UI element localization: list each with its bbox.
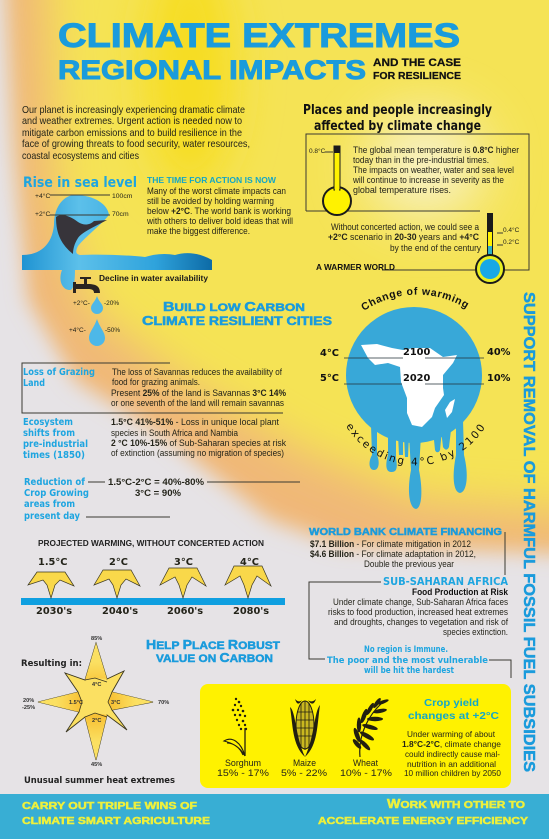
callout: no region is immune xyxy=(327,645,511,678)
panel: ecosystem shifts: times (1850) xyxy=(23,450,85,461)
vertical banner text: SUPPORT REMOVAL OF HARMFUL FOSSIL FUEL SUBSIDIES xyxy=(520,292,537,772)
heading: places and people xyxy=(303,103,492,134)
panel: crop yield xyxy=(200,684,511,788)
labels: crop names and values: 15% - 17% xyxy=(217,768,270,779)
label: unusual summer heat extremes: Unusual summer heat extremes xyxy=(24,776,175,786)
text: energy efficiency: WORK WITH OTHER TO xyxy=(387,797,525,811)
panel: sub-saharan africa xyxy=(309,575,509,659)
heading: crop yield changes: changes at +2°C xyxy=(408,710,499,722)
panel: ecosystem shifts: species in South Africa and Nambia xyxy=(111,428,238,438)
panel: ecosystem shifts: of extinction (assuming no migration of species) xyxy=(111,448,284,458)
chart: water drops: +2°C- xyxy=(73,299,90,307)
text: global mean temperature: will continue to increase in severity as the xyxy=(352,175,504,185)
label: sea level markers: +4°C xyxy=(35,192,50,200)
panel: reduction of crop growing areas xyxy=(24,477,300,522)
heading: places and people: Places and people increasingly xyxy=(303,103,492,118)
labels: crop names and values: Wheat xyxy=(353,758,378,769)
chart: heat extremes star: 1.5°C xyxy=(69,700,83,706)
panel: world bank climate financing xyxy=(309,526,505,575)
intro text: coastal ecosystems and cities xyxy=(22,151,139,162)
callout: no region is immune: No region is Immune. xyxy=(364,645,448,655)
icon: thermometer 2 xyxy=(476,213,520,283)
panel: reduction of crop growing areas: present day xyxy=(24,511,81,522)
intro text: Our planet is increasingly experiencing dramatic climate xyxy=(22,105,245,116)
text: global mean temperature: The global mean temperature is 0.8°C higher xyxy=(353,145,519,155)
panel: loss of grazing land: Loss of Grazing xyxy=(23,367,95,378)
label: sea level markers: 100cm xyxy=(112,193,133,200)
icon: thermometer 0.8 xyxy=(309,146,351,215)
heading: build low carbon: CLIMATE RESILIENT CITIES xyxy=(142,313,332,328)
curved label: exceeding 4C: exceeding 4°C by 2100 xyxy=(347,424,484,466)
callout: no region is immune: will be hit the hardest xyxy=(364,666,454,676)
panel: ecosystem shifts: pre-industrial xyxy=(23,439,88,450)
text: malnutrition note xyxy=(402,729,501,778)
panel: ecosystem shifts: 2 °C 10%-15% of Sub-Saharan species at risk xyxy=(111,438,286,448)
label: sea level markers: 70cm xyxy=(112,211,129,218)
icon: sorghum xyxy=(224,698,247,756)
chart: projected warming timeline: 4°C xyxy=(240,557,259,568)
panel: reduction of crop growing areas: areas from xyxy=(24,499,75,510)
panel: sub-saharan africa: SUB-SAHARAN AFRICA xyxy=(383,575,508,588)
text: time for action: below +2°C. The world bank is working xyxy=(147,206,291,217)
labels: crop names and values xyxy=(217,758,393,779)
panel: reduction of crop growing areas: Crop Growing xyxy=(24,488,89,499)
panel: a warmer world xyxy=(306,134,529,283)
chart: heat extremes star: -25% xyxy=(22,705,35,711)
labels: crop names and values: Sorghum xyxy=(225,758,261,769)
subtitle xyxy=(373,57,461,82)
chart: projected warming timeline: 2030's xyxy=(36,606,72,617)
text: time for action xyxy=(146,175,293,237)
text: malnutrition note: Under warming of about xyxy=(407,729,496,739)
curved label: change of warming: Change of warming xyxy=(362,287,468,310)
intro text: mitigate carbon emissions and to build resilience in the xyxy=(22,128,242,139)
text: without concerted action xyxy=(328,222,481,253)
panel: world bank climate financing: $7.1 Billion - For climate mitigation in 2012 xyxy=(310,539,471,549)
panel: ecosystem shifts xyxy=(23,417,286,461)
chart: heat extremes star: 3°C xyxy=(111,700,120,706)
chart: projected warming timeline: 2060's xyxy=(167,606,203,617)
panel: sub-saharan africa: risks to food production, increased heat extremes xyxy=(328,607,508,617)
text: time for action: with others to deliver bold ideas that will xyxy=(146,216,293,227)
label: warming rows xyxy=(320,347,511,384)
chart: water drops: -50% xyxy=(105,327,120,334)
icon: thermometer 2: 0.2°C xyxy=(503,238,520,246)
icon: wheat xyxy=(351,697,389,757)
label: sea level markers xyxy=(35,192,133,218)
chart: water drops xyxy=(69,296,120,346)
text: time for action: still be avoided by holding warming xyxy=(147,196,274,207)
chart: projected warming timeline xyxy=(21,539,285,617)
intro text: and weather extremes. Urgent action is needed now to xyxy=(22,116,242,127)
heading: crop yield changes xyxy=(408,697,499,722)
text: triple wins: CLIMATE SMART AGRICULTURE xyxy=(22,815,210,827)
labels: crop names and values: 10% - 17% xyxy=(340,768,393,779)
text: malnutrition note: 1.8°C-2°C, climate change xyxy=(402,739,501,749)
chart: projected warming timeline: 3°C xyxy=(174,557,193,568)
panel: loss of grazing land: Present 25% of the land is Savannas 3°C 14% xyxy=(111,388,286,398)
panel: world bank climate financing: WORLD BANK CLIMATE FINANCING xyxy=(309,526,502,538)
heading: rise in sea level: Rise in sea level xyxy=(23,175,137,191)
intro text xyxy=(22,105,250,162)
text: malnutrition note: could indirectly cause mal- xyxy=(405,749,500,759)
footer band xyxy=(0,794,549,839)
chart: heat extremes star: 20% xyxy=(23,698,34,704)
title xyxy=(58,17,460,85)
label: decline in water availability: Decline in water availability xyxy=(99,273,208,283)
panel: sub-saharan africa: Under climate change, Sub-Saharan Africa faces xyxy=(333,597,508,607)
text: global mean temperature: global temperature rises. xyxy=(353,185,451,195)
panel: world bank climate financing: Double the previous year xyxy=(364,559,454,569)
chart: heat extremes star: 70% xyxy=(158,700,169,706)
label: warming rows: 2100 xyxy=(403,347,430,358)
icon: faucet xyxy=(73,277,100,293)
panel: loss of grazing land: or one seventh of the land will remain savannas xyxy=(111,398,284,408)
chart: water drops: +4°C- xyxy=(69,326,86,334)
subtitle: FOR RESILIENCE xyxy=(373,71,461,82)
label: warming rows: 10% xyxy=(487,373,511,384)
intro text: face of growing threats to food security, water resources, xyxy=(22,139,250,150)
panel: ecosystem shifts: 1.5°C 41%-51% - Loss in unique local plant xyxy=(111,417,279,427)
chart: water drops: -20% xyxy=(104,300,119,307)
labels: crop names and values: 5% - 22% xyxy=(281,768,328,779)
label: a warmer world: A WARMER WORLD xyxy=(316,262,395,272)
panel: sub-saharan africa: species extinction. xyxy=(443,627,508,637)
heading: help place robust value: HELP PLACE ROBUST xyxy=(146,637,280,652)
label: warming rows: 4°C xyxy=(320,348,339,359)
map: africa xyxy=(361,344,457,427)
illustration: sea wave xyxy=(22,192,212,290)
text: time for action: THE TIME FOR ACTION IS NOW xyxy=(147,175,277,185)
chart: projected warming timeline: 2080's xyxy=(233,606,269,617)
label: warming rows: 5°C xyxy=(320,373,339,384)
chart: heat extremes star: 2°C xyxy=(92,718,101,724)
panel: loss of grazing land xyxy=(22,363,286,413)
title: CLIMATE EXTREMES xyxy=(58,17,460,55)
chart: heat extremes star xyxy=(22,636,169,768)
chart: projected warming timeline: 2°C xyxy=(109,557,128,568)
panel: ecosystem shifts: Ecosystem xyxy=(23,417,73,428)
panel: sub-saharan africa: Food Production at Risk xyxy=(412,587,509,597)
chart: heat extremes star: 45% xyxy=(91,762,102,768)
panel: reduction of crop growing areas: 3°C = 90% xyxy=(135,488,182,499)
icon: thermometer 0.8: 0.8°C xyxy=(309,147,326,155)
heading: build low carbon xyxy=(142,299,332,328)
title: REGIONAL IMPACTS xyxy=(58,55,366,85)
heading: places and people: affected by climate change xyxy=(314,119,481,134)
chart: heat extremes star: 4°C xyxy=(92,682,101,688)
text: without concerted action: by the end of the century xyxy=(390,243,481,253)
text: time for action: make the biggest difference. xyxy=(147,226,250,237)
text: global mean temperature: today than in the pre-industrial times. xyxy=(353,155,489,165)
text: without concerted action: Without concerted action, we could see a xyxy=(331,222,480,232)
label: resulting in: Resulting in: xyxy=(21,659,82,669)
text: energy efficiency: ACCELERATE ENERGY EFFICIENCY xyxy=(318,815,528,827)
panel: world bank climate financing: $4.6 Billion - For climate adaptation in 2012, xyxy=(310,549,476,559)
heading: help place robust value xyxy=(146,637,280,665)
text: energy efficiency xyxy=(318,797,528,827)
panel: loss of grazing land: food for grazing animals. xyxy=(112,377,200,387)
label: sea level markers: +2°C xyxy=(35,210,50,218)
label: warming rows: 2020 xyxy=(403,373,430,384)
callout: no region is immune: The poor and the most vulnerable xyxy=(327,655,488,666)
panel: loss of grazing land: The loss of Savannas reduces the availability of xyxy=(112,367,282,377)
heading: build low carbon: BUILD LOW CARBON xyxy=(163,299,305,314)
text: triple wins xyxy=(22,800,210,827)
heading: crop yield changes: Crop yield xyxy=(424,697,479,709)
text: global mean temperature xyxy=(352,145,519,195)
chart: projected warming timeline: 2040's xyxy=(102,606,138,617)
icon: thermometer 2: 0.4°C xyxy=(503,226,520,234)
panel: sub-saharan africa: and droughts, changes to vegetation and risk of xyxy=(334,617,508,627)
labels: crop names and values: Maize xyxy=(293,758,316,769)
text: time for action: Many of the worst climate impacts can xyxy=(147,186,286,197)
chart: projected warming timeline: 1.5°C xyxy=(38,557,67,568)
panel: reduction of crop growing areas: Reduction of xyxy=(24,477,86,488)
chart: change of warming globe xyxy=(320,287,511,509)
chart: projected warming timeline: PROJECTED WARMING, WITHOUT CONCERTED ACTION xyxy=(38,539,264,548)
text: without concerted action: +2°C scenario in 20-30 years and +4°C xyxy=(328,232,479,242)
panel: reduction of crop growing areas: 1.5°C-2°C = 40%-80% xyxy=(108,477,205,488)
text: malnutrition note: 10 million children by 2050 xyxy=(404,768,501,778)
subtitle: AND THE CASE xyxy=(373,57,461,69)
text: triple wins: CARRY OUT TRIPLE WINS OF xyxy=(22,800,198,812)
chart: heat extremes star: 85% xyxy=(91,636,102,642)
icon: maize xyxy=(290,699,320,757)
panel: ecosystem shifts: shifts from xyxy=(23,428,75,439)
panel: loss of grazing land: Land xyxy=(23,378,45,389)
heading: help place robust value: VALUE ON CARBON xyxy=(156,650,273,665)
text: global mean temperature: The impacts on weather, water and sea level xyxy=(353,165,514,175)
text: malnutrition note: nutrition in an additional xyxy=(407,759,496,769)
label: warming rows: 40% xyxy=(487,347,511,358)
